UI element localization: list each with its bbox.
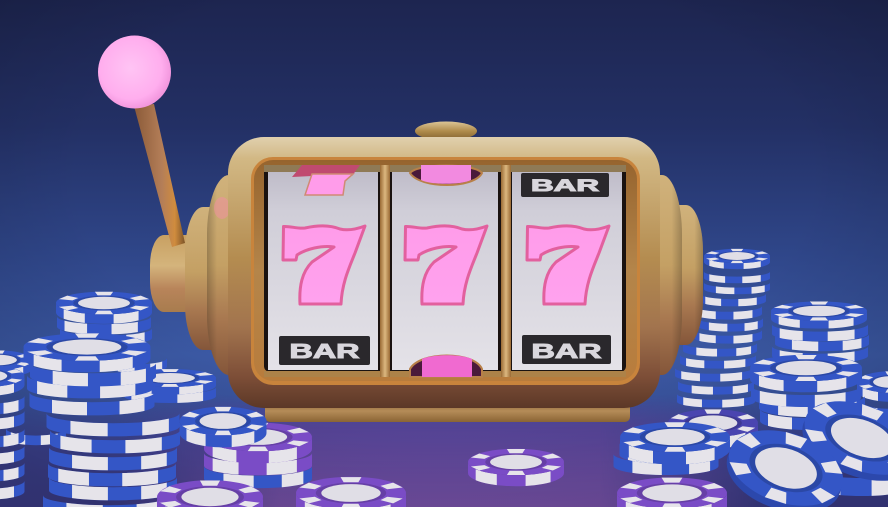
seven	[283, 226, 365, 304]
chips: front left tower	[0, 333, 180, 507]
reel 3	[512, 172, 622, 370]
reel dividers	[380, 165, 511, 377]
seven	[527, 226, 609, 304]
window frame	[251, 157, 640, 385]
cabinet body	[228, 137, 660, 408]
seven	[405, 226, 487, 304]
slot machine	[98, 36, 703, 422]
BAR label: BAR	[290, 341, 360, 363]
left side hub and steps	[150, 175, 257, 375]
BAR label top: BAR	[531, 176, 599, 195]
reel 1	[268, 165, 378, 370]
top button	[415, 122, 477, 140]
chips: back left stack	[0, 292, 216, 447]
chips: purple and blue stack	[180, 407, 312, 490]
reel 2	[392, 165, 498, 377]
lever ball	[98, 36, 171, 108]
bottom pink symbol	[410, 355, 482, 377]
partial seven	[292, 165, 360, 195]
BAR label bottom: BAR	[532, 341, 602, 363]
chips: tall column right	[675, 249, 770, 409]
upper and lower frame lips	[264, 165, 626, 377]
BAR label bottom	[522, 335, 611, 364]
lever stick	[134, 104, 185, 247]
machine base	[265, 400, 630, 422]
top pink symbol	[410, 165, 482, 185]
chips: right front stacks	[614, 355, 888, 507]
right side hub and steps	[630, 175, 703, 375]
BAR label	[279, 336, 370, 365]
BAR label top	[521, 173, 609, 197]
chips: bottom purple chips	[157, 449, 564, 507]
chips: right back stack	[771, 301, 888, 421]
